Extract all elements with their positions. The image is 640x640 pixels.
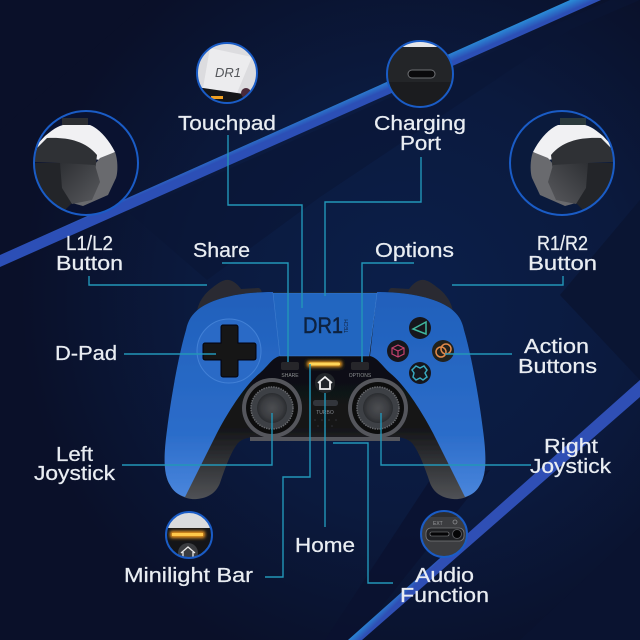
thumbnail: audio function (421, 511, 467, 557)
turbo button: TURBO (316, 410, 334, 416)
top diagonal band (0, 0, 601, 267)
connector: options (362, 263, 414, 362)
connector: L1/L2 (89, 276, 207, 285)
bottom strip (250, 437, 400, 441)
right blue shell (370, 292, 485, 497)
label: R1/R2 Button (528, 233, 597, 275)
connector: left joystick (122, 413, 272, 465)
label: Charging Port: Port (400, 133, 441, 155)
label: L1/L2 Button (56, 233, 123, 275)
square button (387, 340, 409, 362)
connector: share (222, 263, 288, 362)
label: Action Buttons: Buttons (518, 356, 597, 378)
controller (165, 280, 485, 499)
thumbnail: audio function: EXT (433, 521, 443, 527)
label: Options: Options (375, 240, 454, 262)
speaker dots (314, 419, 337, 427)
connector: touchpad (228, 135, 302, 308)
bottom diagonal band (348, 380, 640, 640)
label: Audio Function (400, 565, 489, 607)
label: Left Joystick: Joystick (34, 463, 116, 485)
connector: d-pad (124, 353, 216, 355)
connector: R1/R2 (452, 276, 563, 285)
label: Share: Share (193, 240, 250, 262)
thumbnail: R1/R2 (510, 111, 618, 215)
thumbnail: touchpad: DR1 (215, 65, 241, 80)
label: Action Buttons (518, 336, 597, 378)
logo: DR1 (303, 313, 343, 338)
options button (349, 362, 372, 379)
connector: minilight bar (265, 364, 310, 577)
thumbnail: L1/L2 (30, 111, 138, 215)
connector: home (324, 393, 326, 527)
light bar (307, 361, 342, 367)
cross button (409, 362, 431, 384)
right joystick (348, 378, 408, 438)
label: L1/L2 Button: L1/L2 (66, 233, 113, 255)
left blue shell (165, 292, 280, 497)
right trigger (388, 280, 453, 312)
label: Touchpad: Touchpad (178, 113, 276, 135)
thumbnail: charging port (387, 41, 453, 107)
label: Right Joystick (530, 436, 612, 478)
label: Action Buttons: Action (524, 336, 589, 358)
label: Charging Port (374, 113, 466, 155)
action buttons (387, 317, 454, 384)
label: Minilight Bar: Minilight Bar (124, 565, 253, 587)
connector: audio function (333, 443, 393, 583)
share button (281, 362, 299, 379)
label: Home: Home (295, 535, 355, 557)
label: Left Joystick: Left (56, 444, 93, 466)
label: R1/R2 Button: Button (528, 253, 597, 275)
options button: OPTIONS (349, 373, 372, 379)
controller body black (165, 292, 485, 499)
label: Charging Port: Charging (374, 113, 466, 135)
logo: TECH (344, 319, 350, 333)
label: Right Joystick: Right (544, 436, 598, 458)
connector: charging port (325, 157, 421, 296)
label: Left Joystick (34, 444, 116, 485)
d-pad (197, 319, 261, 383)
touchpad (273, 293, 377, 356)
circle button (432, 340, 454, 362)
left trigger (197, 280, 262, 312)
triangle button (409, 317, 431, 339)
thumbnail: minilight bar (166, 512, 212, 563)
connector: action buttons (445, 353, 512, 355)
label: Right Joystick: Joystick (530, 456, 612, 478)
share button: SHARE (281, 373, 299, 379)
turbo button (313, 400, 338, 416)
label: Audio Function: Audio (415, 565, 474, 587)
label: D-Pad: D-Pad (55, 343, 117, 365)
label: Audio Function: Function (400, 585, 489, 607)
label: L1/L2 Button: Button (56, 253, 123, 275)
label: R1/R2 Button: R1/R2 (537, 233, 588, 255)
thumbnail: touchpad (197, 43, 257, 103)
connector: right joystick (381, 413, 531, 465)
left joystick (242, 378, 302, 438)
home button (315, 373, 335, 393)
